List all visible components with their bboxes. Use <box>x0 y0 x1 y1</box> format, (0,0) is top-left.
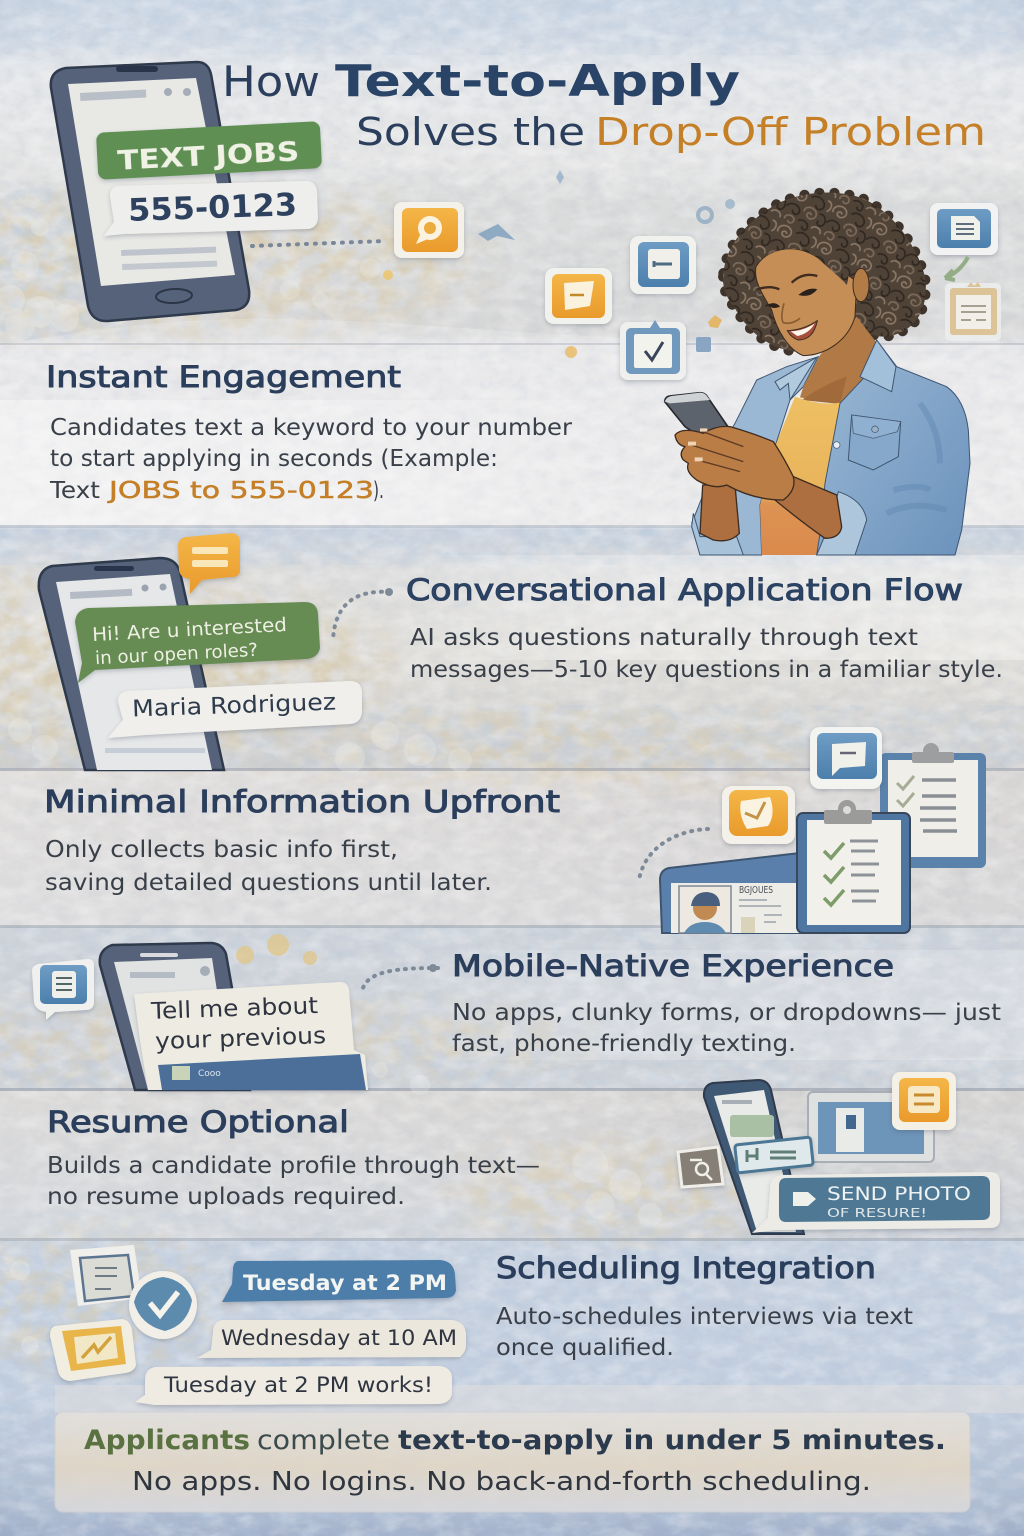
jacket left panel and sleeve <box>692 357 818 555</box>
shirt <box>760 397 841 555</box>
neck <box>800 317 878 404</box>
body text: Only collects basic info first, <box>45 837 398 863</box>
section: scheduling integration <box>496 1251 913 1361</box>
body text: fast, phone-friendly texting. <box>452 1031 796 1057</box>
body text <box>47 1153 540 1210</box>
body text: Builds a candidate profile through text— <box>47 1153 540 1179</box>
icon: tan clipboard <box>945 282 1001 341</box>
clipboard icon <box>70 1245 142 1306</box>
title: Text-to-Apply <box>335 56 740 107</box>
phone <box>704 1080 813 1234</box>
section: resume optional <box>47 1105 540 1210</box>
body text: Text <box>49 478 100 504</box>
title: How <box>222 57 320 106</box>
section: minimal information upfront <box>44 785 560 896</box>
icon: blue card <box>630 236 696 294</box>
dotted arrow to chat icon <box>252 241 386 246</box>
send photo bubble: SEND PHOTO <box>827 1183 971 1205</box>
body text: Auto-schedules interviews via text <box>496 1304 913 1330</box>
monitor <box>808 1092 934 1162</box>
send photo bubble: OF RESURE! <box>827 1206 927 1220</box>
summary line: text-to-apply in under 5 minutes. <box>398 1425 946 1456</box>
clipboards and profile illustration <box>639 727 986 933</box>
body text: messages—5-10 key questions in a familiar style. <box>410 657 1003 683</box>
body text <box>452 1000 1001 1057</box>
check badge <box>129 1271 197 1339</box>
section: conversational application flow <box>406 573 1003 683</box>
body text <box>45 837 492 896</box>
green arrow <box>945 257 968 280</box>
summary line: Applicants <box>84 1425 250 1456</box>
decorative blue shape <box>478 224 515 241</box>
dotted connector <box>639 829 708 880</box>
footer backing band <box>55 1385 1024 1413</box>
heading: Resume Optional <box>47 1105 349 1139</box>
name bubble <box>108 681 362 738</box>
orange clock icon <box>722 786 795 844</box>
name bubble: Maria Rodriguez <box>132 689 336 723</box>
body text: to start applying in seconds (Example: <box>50 446 498 472</box>
front clipboard <box>797 800 910 933</box>
arm and hands <box>675 426 842 541</box>
chat icon <box>810 727 882 789</box>
jacket right panel <box>692 340 970 555</box>
icon: checkmark clipboard <box>620 320 686 380</box>
green bubble <box>75 602 320 683</box>
green bubble <box>96 121 322 180</box>
dotted connector <box>362 964 438 992</box>
body text <box>49 415 573 504</box>
heading: Minimal Information Upfront <box>44 785 560 820</box>
bubble: Tuesday at 2 PM works: Tuesday at 2 PM works! <box>163 1373 433 1397</box>
phone illustration: mobile native <box>32 934 368 1090</box>
phone illustration: TEXT JOBS <box>51 62 322 321</box>
small accent dots <box>383 170 735 358</box>
send photo bubble <box>752 1172 1000 1233</box>
number bubble <box>104 181 318 236</box>
body text: no resume uploads required. <box>47 1184 405 1210</box>
body text: Candidates text a keyword to your number <box>50 415 573 441</box>
icon: blue document <box>930 203 998 255</box>
grey search icon <box>678 1147 723 1187</box>
heading: Mobile-Native Experience <box>452 949 894 983</box>
section: instant engagement <box>46 360 573 504</box>
heading: Scheduling Integration <box>496 1251 876 1285</box>
scheduling illustration <box>50 1245 466 1405</box>
phone illustration: mobile native: your previous <box>155 1023 326 1055</box>
green bubble: TEXT JOBS <box>117 136 300 177</box>
phone illustration: mobile native: Tell me about <box>150 993 318 1025</box>
cloud puffs <box>0 218 662 1354</box>
icon: orange card <box>545 268 612 324</box>
illustration: smiling woman with phone <box>665 193 970 555</box>
tagline: No apps. No logins. No back-and-forth scheduling. <box>132 1467 871 1497</box>
summary line: complete <box>257 1425 390 1456</box>
bubble: Wednesday at 10 AM <box>197 1320 466 1358</box>
bubble: Tuesday at 2 PM works <box>135 1366 452 1405</box>
bubble: Tuesday at 2 PM <box>222 1260 456 1302</box>
message card <box>134 982 368 1090</box>
summary line <box>84 1425 946 1456</box>
bubble: Wednesday at 10 AM: Wednesday at 10 AM <box>221 1326 457 1350</box>
body text: once qualified. <box>496 1335 674 1361</box>
orange icon <box>892 1072 956 1130</box>
profile tablet: BGJOUES <box>739 885 773 896</box>
body text: ). <box>373 478 384 504</box>
hair <box>723 193 926 352</box>
phone illustration: mobile native: Cooo <box>198 1069 221 1079</box>
face <box>755 238 869 356</box>
dotted connector <box>333 588 393 640</box>
title <box>222 56 986 154</box>
number bubble: 555-0123 <box>128 187 298 229</box>
section: mobile-native experience <box>452 949 1001 1057</box>
body text: JOBS to 555-0123 <box>106 478 374 504</box>
bubble: Tuesday at 2 PM: Tuesday at 2 PM <box>243 1271 447 1295</box>
title: Solves the <box>356 110 585 154</box>
blue document icon <box>32 959 94 1020</box>
heading: Conversational Application Flow <box>406 573 963 607</box>
green bubble: in our open roles? <box>95 640 258 669</box>
body text <box>496 1304 913 1361</box>
decorative chat bubbles <box>236 934 317 965</box>
green bubble: Hi! Are u interested <box>92 614 287 646</box>
profile tablet <box>660 853 810 933</box>
orange chat icon <box>178 533 240 594</box>
heading: Instant Engagement <box>46 360 401 394</box>
callout: summary panel <box>55 1412 970 1512</box>
back clipboard <box>880 743 986 868</box>
icon: orange chat <box>394 202 464 258</box>
body text: AI asks questions naturally through text <box>410 625 918 651</box>
body text: No apps, clunky forms, or dropdowns— just <box>452 1000 1001 1026</box>
orange chart icon <box>50 1319 136 1381</box>
phone and resume illustration <box>678 1072 1000 1234</box>
phone illustration: conversation <box>39 533 362 770</box>
small phone <box>665 393 742 447</box>
body text <box>410 625 1003 683</box>
body text: saving detailed questions until later. <box>45 870 492 896</box>
title: Drop-Off Problem <box>595 110 986 154</box>
